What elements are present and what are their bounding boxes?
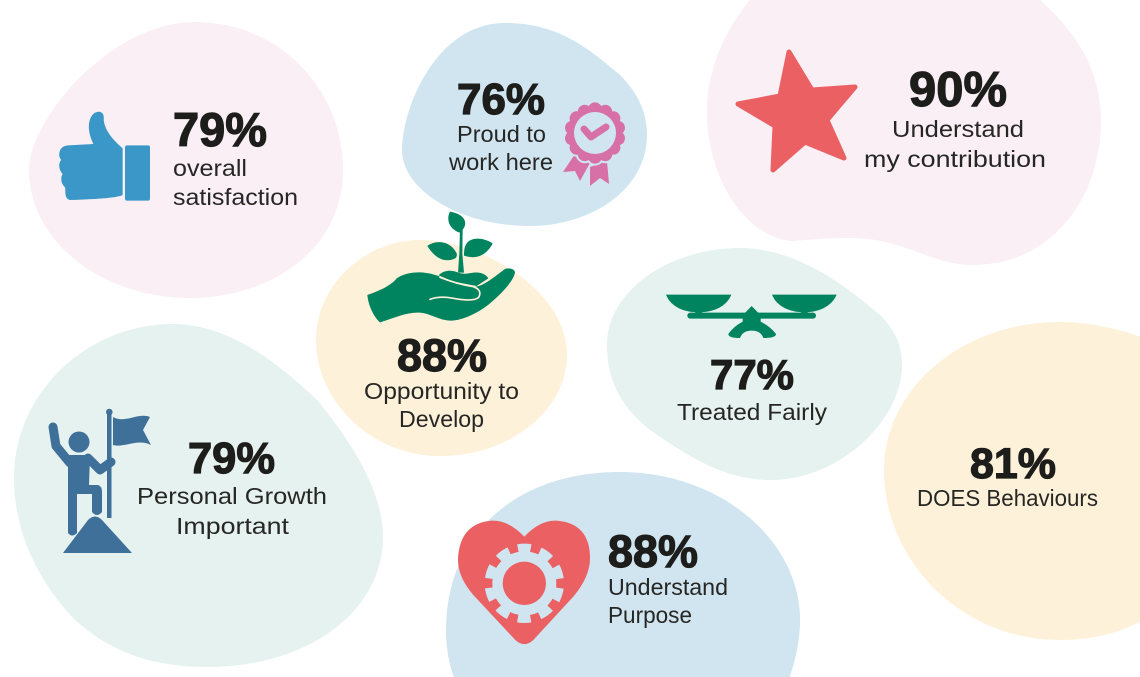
label: personal growth important: Important: [176, 513, 290, 539]
statistic: 79%: 79%: [173, 103, 267, 156]
label: overall satisfaction: [173, 155, 298, 210]
panel: proud to work here: [402, 23, 647, 226]
label: understand my contribution: Understand: [892, 116, 1024, 142]
statistic: 77%: 77%: [710, 351, 794, 398]
icon: hand holding seedling: [367, 212, 515, 322]
statistic: 79%: 79%: [188, 434, 275, 483]
icon: star: [738, 52, 855, 170]
panel: understand my contribution: [707, 0, 1101, 265]
label: understand purpose: [608, 574, 728, 628]
panel: opportunity to develop: [316, 212, 567, 456]
label: understand purpose: Understand: [608, 574, 728, 600]
label: understand my contribution: my contribution: [864, 146, 1046, 172]
icon: thumbs up: [59, 112, 150, 201]
panel: understand purpose: [446, 472, 800, 677]
label: opportunity to develop: [364, 378, 519, 432]
label: overall satisfaction: satisfaction: [173, 184, 298, 210]
panel: DOES behaviours: [884, 322, 1140, 640]
statistic: 90%: 90%: [909, 63, 1007, 117]
panel: personal growth important: [14, 324, 383, 667]
label: personal growth important: [137, 483, 327, 539]
panel: overall satisfaction: [29, 22, 343, 298]
label: proud to work here: Proud to: [457, 121, 546, 147]
label: DOES behaviours: DOES Behaviours: [917, 485, 1098, 511]
icon: rosette badge: [563, 101, 626, 186]
label: overall satisfaction: overall: [173, 155, 247, 181]
label: opportunity to develop: Develop: [399, 406, 484, 432]
label: personal growth important: Personal Growth: [137, 483, 327, 509]
statistic: 81%: 81%: [970, 440, 1056, 488]
statistic: 76%: 76%: [457, 75, 545, 124]
panel: treated fairly: [607, 248, 902, 480]
statistic: 88%: 88%: [608, 526, 698, 577]
label: opportunity to develop: Opportunity to: [364, 378, 519, 404]
statistic: 88%: 88%: [397, 330, 487, 381]
label: understand my contribution: [864, 116, 1046, 172]
icon: balance scales: [666, 295, 837, 338]
label: proud to work here: work here: [448, 149, 553, 175]
label: proud to work here: [448, 121, 553, 175]
icon: heart with gear: [458, 521, 590, 644]
icon: climber with flag: [53, 409, 151, 553]
label: treated fairly: Treated Fairly: [677, 399, 827, 425]
label: understand purpose: Purpose: [608, 602, 692, 628]
